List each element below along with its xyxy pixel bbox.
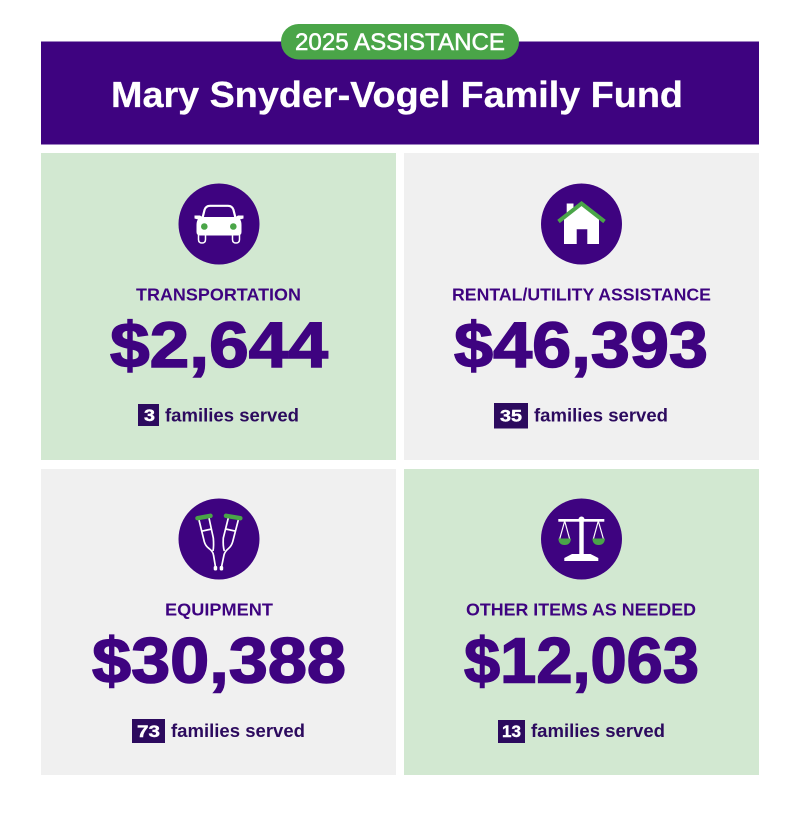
families served: 3: families served <box>165 406 299 426</box>
panel: rental/utility assistance <box>404 153 759 460</box>
families served: 35: 35 <box>500 406 522 426</box>
icon: scales <box>541 498 622 580</box>
title: Mary Snyder-Vogel Family Fund <box>111 74 683 115</box>
families served: 13: 13 <box>502 722 521 741</box>
icon: house <box>541 184 622 264</box>
families served: 3: 3 <box>144 406 155 425</box>
label: rental/utility assistance: RENTAL/UTILITY ASSISTANCE <box>452 284 711 304</box>
amount: $12,063: $12,063 <box>464 624 699 696</box>
families served: 35: families served <box>534 406 668 426</box>
icon: car <box>178 184 260 264</box>
icon: crutches <box>178 498 260 580</box>
families served: 13 <box>498 720 665 743</box>
families served: 35 <box>494 403 668 428</box>
panel: equipment <box>41 469 396 775</box>
badge: 2025 assistance: 2025 ASSISTANCE <box>295 29 505 56</box>
panel: transportation <box>41 153 396 460</box>
label: equipment: EQUIPMENT <box>165 600 273 620</box>
families served: 13: families served <box>531 721 665 741</box>
label: transportation: TRANSPORTATION <box>136 284 301 304</box>
amount: $30,388: $30,388 <box>92 624 346 696</box>
amount: $2,644: $2,644 <box>110 309 328 381</box>
label: other items as needed: OTHER ITEMS AS NEEDED <box>466 600 696 620</box>
families served: 73: 73 <box>137 722 160 741</box>
header banner <box>41 42 759 144</box>
badge: 2025 assistance <box>281 24 519 60</box>
families served: 73 <box>132 719 305 743</box>
panel: other items as needed <box>404 469 759 775</box>
families served: 73: families served <box>171 721 305 741</box>
amount: $46,393: $46,393 <box>454 309 708 381</box>
